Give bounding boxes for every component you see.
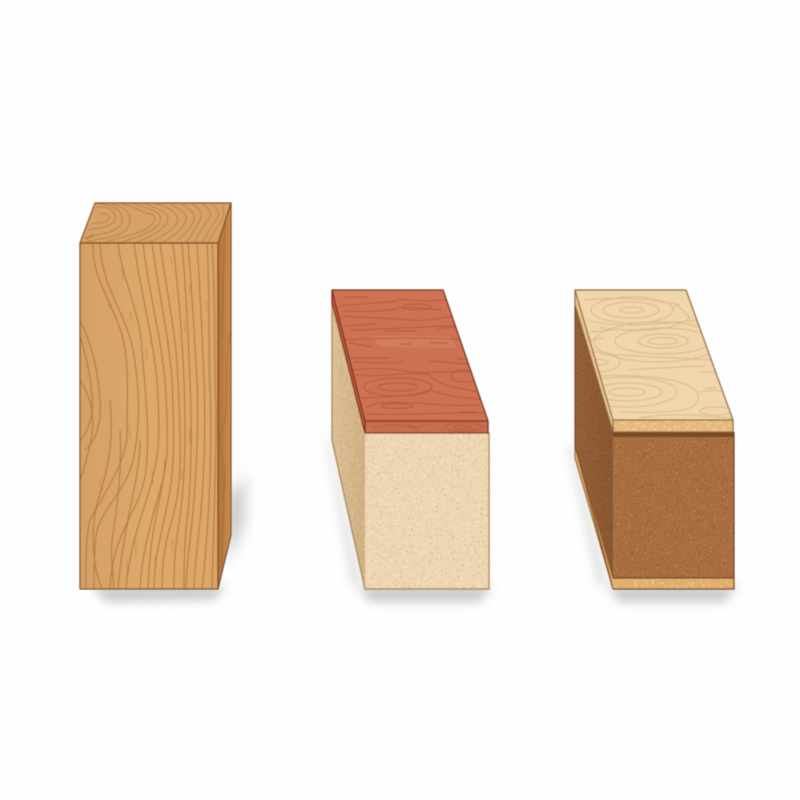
block: solid timber — [80, 203, 246, 602]
red veneer left edge and outline — [332, 291, 365, 432]
cast shadow: particle board — [358, 586, 492, 602]
light veneer edge — [613, 420, 733, 432]
cast shadow: fibre board — [606, 586, 738, 602]
block: particle board with red veneer — [326, 290, 492, 602]
top face: solid timber — [80, 203, 231, 243]
front face: fibre board — [613, 432, 734, 579]
light veneer left edge and outline — [575, 291, 613, 432]
light veneer top — [572, 290, 733, 420]
outline: solid timber — [80, 203, 231, 589]
red veneer front edge — [365, 421, 488, 433]
left face: fibre board — [574, 300, 614, 590]
block: fibre board with light veneer — [568, 290, 738, 602]
illustration: three material blocks — [78, 202, 738, 607]
cast shadow: solid timber — [92, 474, 246, 602]
side face: solid timber — [218, 203, 231, 589]
left face: particle board — [332, 308, 366, 585]
left bottom strip: fibre board — [575, 445, 613, 589]
red veneer top — [332, 290, 488, 421]
front face: particle board — [365, 432, 489, 589]
front face with grain: solid timber — [80, 243, 218, 589]
bottom veneer strip: fibre board — [612, 578, 734, 589]
